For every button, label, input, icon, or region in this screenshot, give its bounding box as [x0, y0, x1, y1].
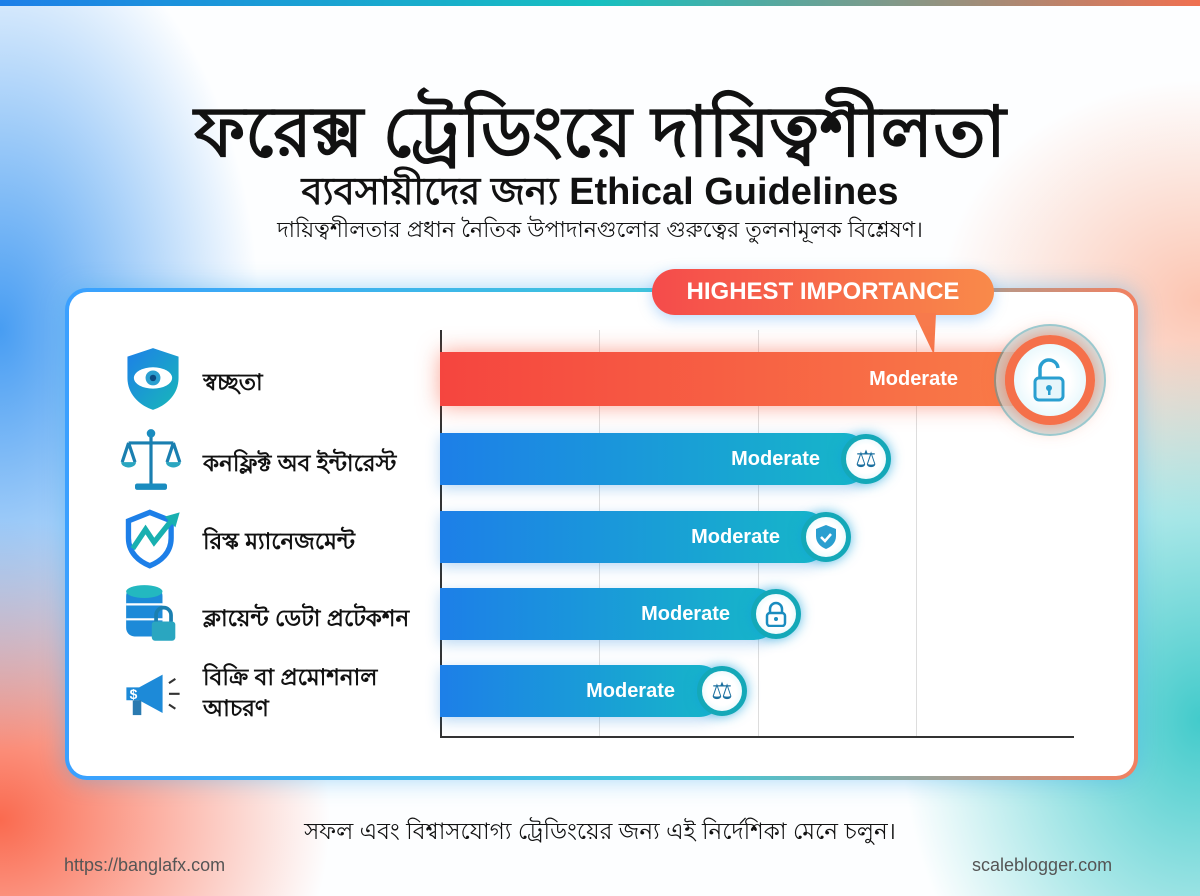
icon: open lock large	[1005, 335, 1095, 425]
panel: chart card	[65, 288, 1138, 780]
bar: client data protection: Moderate	[641, 602, 730, 624]
icon: megaphone	[126, 674, 180, 716]
row label: client data protection: ক্লায়েন্ট ডেটা প্রটেকশন	[203, 605, 409, 631]
row label: conflict of interest	[120, 429, 398, 490]
row label: sales/promotional conduct: আচরণ	[203, 695, 269, 721]
bar: sales/promotional conduct: Moderate	[586, 680, 675, 702]
icon: shield check	[801, 512, 851, 562]
row label: risk management	[126, 510, 356, 569]
bar: conflict of interest	[440, 433, 870, 485]
bar: sales/promotional conduct	[440, 665, 725, 717]
row label: sales/promotional conduct	[126, 663, 378, 721]
chart axes and gridlines	[440, 330, 1074, 738]
row label: risk management: রিস্ক ম্যানেজমেন্ট	[203, 528, 355, 554]
bar: client data protection	[440, 588, 780, 640]
footer url right: scaleblogger.com	[972, 855, 1112, 875]
bar: transparency (highest): Moderate	[869, 368, 958, 390]
bar: transparency (highest)	[440, 352, 1040, 406]
description: দায়িত্বশীলতার প্রধান নৈতিক উপাদানগুলোর গুরুত্বের তুলনামূলক বিশ্লেষণ।	[277, 217, 923, 242]
icon: shield eye	[127, 348, 179, 410]
row label: transparency: স্বচ্ছতা	[203, 369, 263, 395]
row label: client data protection	[126, 585, 410, 641]
icon: megaphone: $	[130, 686, 138, 702]
bar: risk management	[440, 511, 830, 563]
row label: transparency	[127, 348, 264, 410]
icon: scales small: ⚖	[711, 678, 733, 704]
icon: lock	[751, 589, 801, 639]
icon: shield with arrow	[126, 510, 180, 569]
icon: scales	[841, 434, 891, 484]
callout: highest importance: HIGHEST IMPORTANCE	[687, 278, 959, 305]
bar: risk management: Moderate	[691, 526, 780, 548]
row label: sales/promotional conduct: বিক্রি বা প্রমোশনাল	[203, 664, 377, 690]
title: ফরেক্স ট্রেডিংয়ে দায়িত্বশীলতা	[194, 93, 1006, 171]
footer url left: https://banglafx.com	[64, 855, 225, 875]
footer text: সফল এবং বিশ্বাসযোগ্য ট্রেডিংয়ের জন্য এই নির্দেশিকা মেনে চলুন।	[304, 818, 896, 844]
icon: scales of justice	[120, 429, 182, 490]
callout: highest importance	[645, 265, 1001, 352]
row label: conflict of interest: কনফ্লিক্ট অব ইন্টারেস্ট	[203, 450, 396, 476]
icon: database lock	[126, 585, 176, 641]
bar: conflict of interest: Moderate	[731, 448, 820, 470]
subtitle: ব্যবসায়ীদের জন্য Ethical Guidelines	[301, 171, 899, 213]
icon: scales: ⚖	[855, 446, 877, 472]
icon: scales small	[697, 666, 747, 716]
